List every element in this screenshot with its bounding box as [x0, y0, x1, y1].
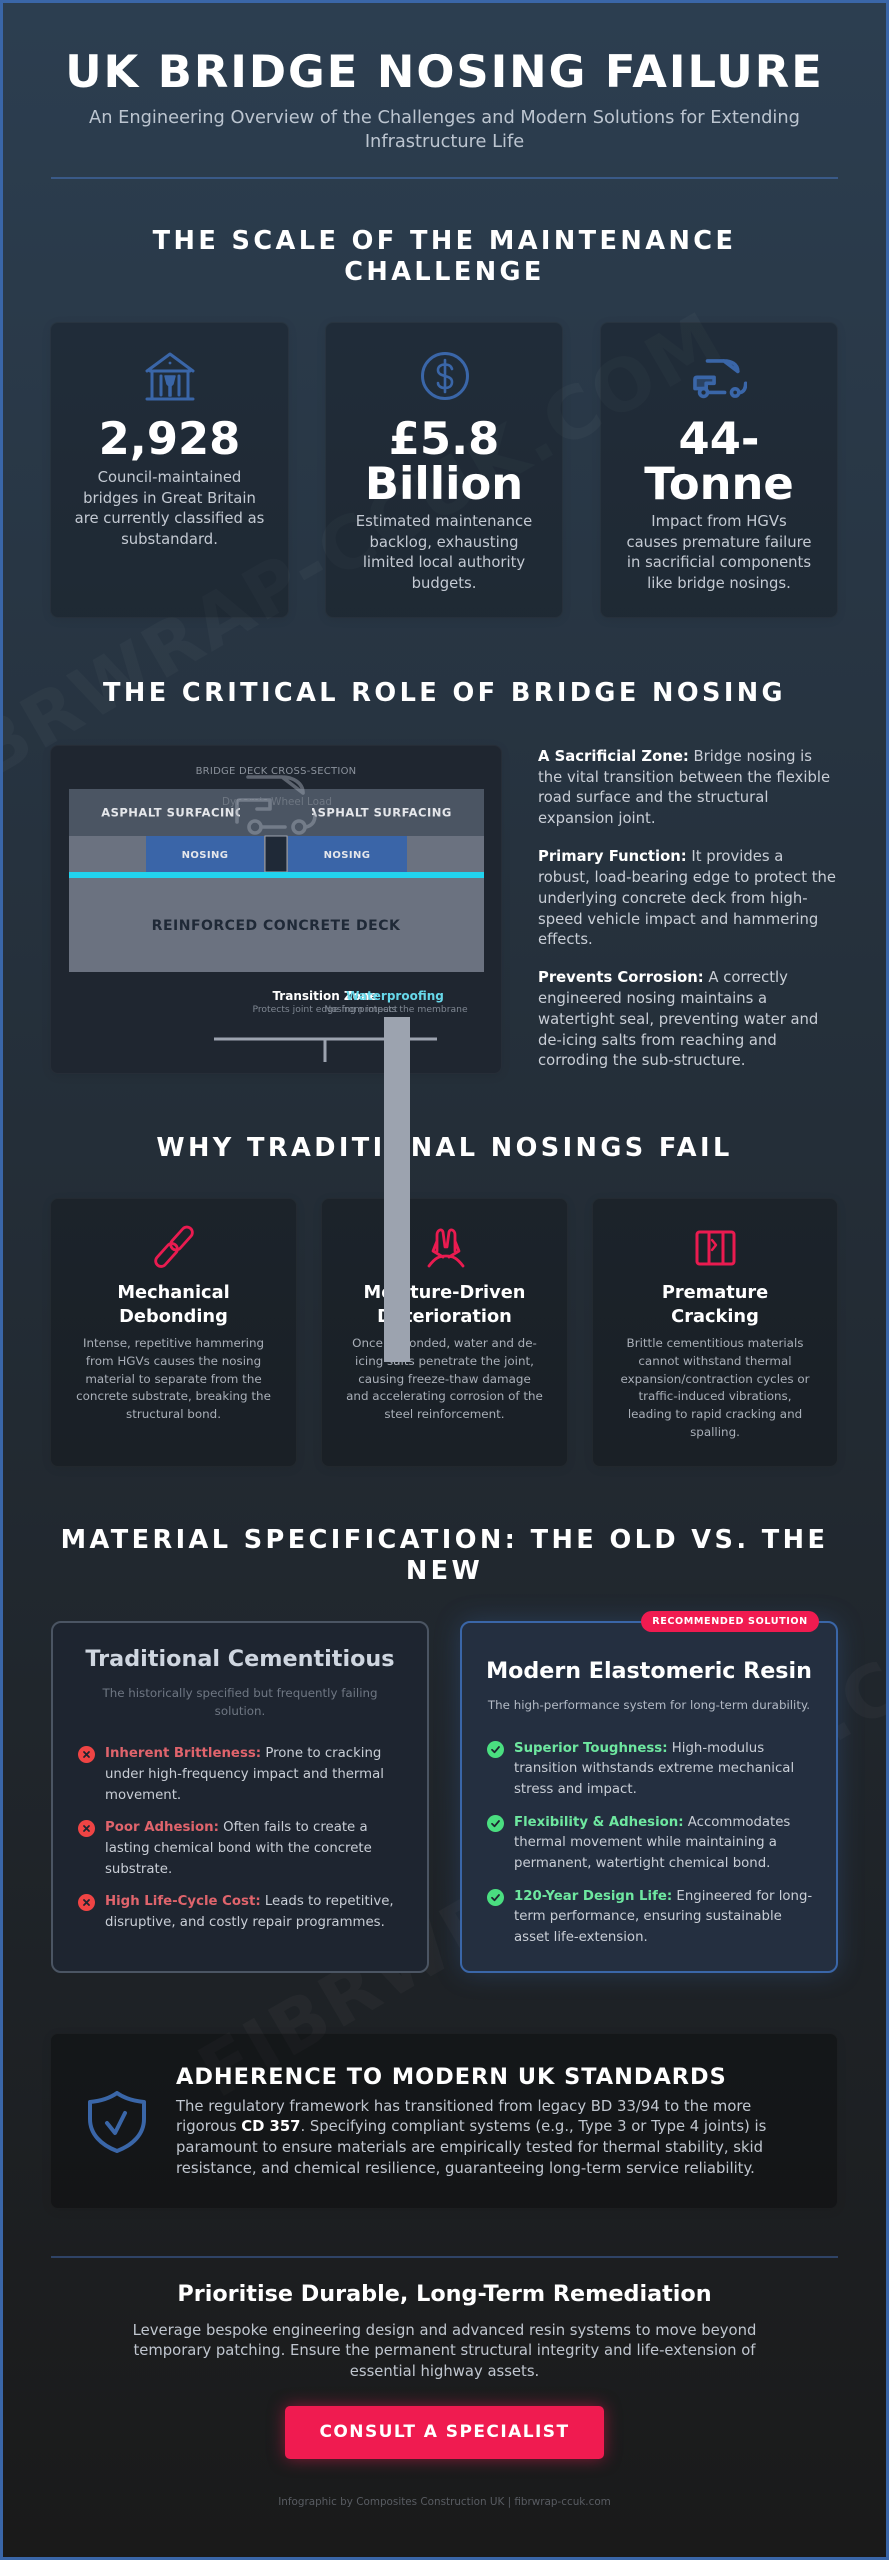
item: flexibility: Flexibility & Adhesion: Accommodates [514, 1814, 790, 1830]
label: waterproofing: Nosing protects the membrane [324, 1004, 468, 1015]
icon: chain link [154, 1226, 194, 1268]
layer: asphalt: ASPHALT SURFACING [308, 806, 452, 820]
stat caption: bridges in Great Britain [83, 490, 256, 507]
icon: cracked panel [696, 1230, 736, 1266]
icon: cross [78, 1746, 95, 1763]
paragraph: sacrificial zone [538, 748, 830, 827]
subtitle [89, 107, 800, 152]
cause title: Premature [662, 1282, 768, 1303]
recommended badge [641, 1611, 819, 1632]
paragraph: sacrificial zone: expansion joint. [538, 810, 656, 827]
panel: premature cracking [592, 1198, 838, 1467]
icon: currency [421, 352, 469, 400]
stat caption: like bridge nosings. [647, 575, 791, 592]
stat number: 2,928 [99, 412, 240, 465]
stat caption: are currently classified as [75, 510, 264, 527]
panel: modern elastomeric resin [460, 1621, 838, 1973]
standards text: The regulatory framework has transitioned from legacy BD 33/94 to the more [176, 2098, 751, 2114]
panel: stat bridges [50, 322, 289, 618]
right nosing [288, 836, 407, 872]
paragraph: prevents corrosion: engineered nosing maintains a [538, 990, 767, 1007]
left nosing: NOSING [182, 850, 228, 861]
item: adhesion: Poor Adhesion: Often fails to create a [105, 1820, 368, 1835]
label: transition zone: Protects joint edge from impact [252, 1004, 398, 1015]
icon: hands and water [428, 1228, 464, 1268]
item: adhesion: lasting chemical bond with the concrete [105, 1841, 372, 1856]
stat number: Tonne [644, 457, 794, 510]
panel: moisture-driven deterioration [321, 1198, 568, 1467]
stat caption [356, 513, 532, 592]
standards text: resistance, and chemical resilience, guaranteeing long-term service reliability. [176, 2160, 755, 2177]
item: toughness [487, 1740, 794, 1797]
wheel load label: Dynamic Wheel Load [222, 796, 332, 808]
item: adhesion: substrate. [105, 1862, 172, 1877]
panel: bridge cross-section diagram [50, 745, 502, 1074]
stat caption: causes premature failure [626, 534, 812, 551]
panel subtitle [102, 1686, 378, 1718]
stat caption [626, 513, 812, 592]
stat number: Billion [365, 457, 523, 510]
heading: critical role: THE CRITICAL ROLE OF BRIDGE NOSING [103, 678, 786, 708]
cause text: Brittle cementitious materials [627, 1336, 803, 1350]
item: brittleness: Inherent Brittleness: Prone to cracking [105, 1746, 381, 1761]
item: design life: term performance, ensuring sustainable [514, 1909, 782, 1924]
panel: stat backlog [325, 322, 563, 618]
paragraph: sacrificial zone: A Sacrificial Zone: Bridge nosing is [538, 748, 812, 765]
heading: material specification: NEW [406, 1556, 483, 1586]
cause title: Moisture-Driven [364, 1282, 525, 1303]
dimension bracket [214, 1039, 437, 1062]
call-to-action heading: Prioritise Durable, Long-Term Remediation [177, 2281, 712, 2307]
call-to-action text: essential highway assets. [350, 2363, 539, 2380]
stray grey arrow shaft [384, 1017, 410, 1362]
stat number: £5.8 [389, 412, 499, 465]
item: brittleness: under high-frequency impact and thermal [105, 1767, 384, 1782]
cause text [76, 1336, 271, 1421]
layer: asphalt [69, 789, 484, 836]
cause title [662, 1282, 768, 1327]
layer: asphalt: ASPHALT SURFACING [101, 806, 245, 820]
item: flexibility [487, 1814, 790, 1871]
icon: cross [78, 1820, 95, 1837]
item: design life: asset life-extension. [514, 1930, 648, 1945]
standards heading: ADHERENCE TO MODERN UK STANDARDS [176, 2064, 727, 2090]
heading: material specification [61, 1525, 828, 1586]
standards text: rigorous CD 357. Specifying compliant systems (e.g., Type 3 or Type 4 joints) is [176, 2118, 766, 2135]
label: waterproofing [324, 989, 468, 1015]
recommended badge: RECOMMENDED SOLUTION [652, 1616, 808, 1627]
cause text: steel reinforcement. [384, 1407, 505, 1421]
heading: material specification: MATERIAL SPECIFICATION: THE OLD VS. THE [61, 1525, 828, 1555]
cause text: Intense, repetitive hammering [83, 1336, 264, 1350]
list: drawbacks [78, 1746, 394, 1930]
stat caption: substandard. [121, 531, 218, 548]
button: consult: CONSULT A SPECIALIST [319, 2422, 570, 2442]
concrete deck [69, 878, 484, 972]
left nosing [146, 836, 264, 872]
panel title: Modern Elastomeric Resin [486, 1658, 812, 1684]
item: cost [78, 1894, 394, 1930]
cause text: causing freeze-thaw damage [358, 1372, 531, 1386]
item: brittleness [78, 1746, 384, 1803]
panel: traditional cementitious [51, 1621, 429, 1973]
layer: side concrete [69, 836, 484, 872]
cause text: structural bond. [126, 1407, 221, 1421]
icon: check [487, 1815, 504, 1832]
expansion joint [265, 836, 287, 872]
call-to-action text: Leverage bespoke engineering design and advanced resin systems to move beyond [133, 2322, 756, 2338]
call-to-action text: temporary patching. Ensure the permanent structural integrity and life-extension of [133, 2342, 756, 2359]
icon: check [487, 1889, 504, 1906]
concrete deck: REINFORCED CONCRETE DECK [152, 918, 401, 934]
item: brittleness: movement. [105, 1788, 181, 1803]
stat caption: in sacrificial components [627, 554, 811, 571]
cause text: spalling. [690, 1425, 740, 1439]
label: transition zone: Transition Zone [272, 989, 378, 1003]
paragraph: primary function: effects. [538, 931, 593, 948]
list: benefits [487, 1740, 812, 1945]
right nosing: NOSING [324, 850, 370, 861]
paragraph: prevents corrosion: de-icing salts from reaching and [538, 1032, 777, 1049]
panel subtitle: solution. [215, 1704, 265, 1718]
panel title: Traditional Cementitious [85, 1646, 395, 1672]
panel subtitle: The high-performance system for long-term durability. [488, 1698, 810, 1712]
stat caption: Estimated maintenance [356, 513, 532, 530]
paragraph: prevents corrosion: Prevents Corrosion: A correctly [538, 969, 788, 986]
label: transition zone [252, 989, 398, 1015]
cause text: material to separate from the [85, 1372, 262, 1386]
item: adhesion [78, 1820, 372, 1877]
button: consult [285, 2406, 604, 2459]
stat caption: Council-maintained [98, 469, 241, 486]
icon: cross [78, 1894, 95, 1911]
paragraph: prevents corrosion: corroding the sub-structure. [538, 1052, 745, 1069]
item: flexibility: thermal movement while maintaining a [514, 1835, 777, 1850]
cause text: concrete substrate, breaking the [76, 1389, 271, 1403]
call-to-action text [0, 2320, 889, 2383]
heading: scale of the challenge: THE SCALE OF THE MAINTENANCE [153, 226, 736, 256]
paragraph: primary function: Primary Function: It provides a [538, 848, 783, 865]
subtitle: Infrastructure Life [365, 131, 524, 152]
stat number: 44- [679, 412, 759, 465]
item: toughness: Superior Toughness: High-modulus [514, 1740, 764, 1756]
standards text: paramount to ensure materials are empirically tested for thermal stability, skid [176, 2139, 763, 2156]
stat caption [75, 469, 264, 548]
item: design life: 120-Year Design Life: Engineered for long- [514, 1888, 812, 1904]
cause text: from HGVs causes the nosing [86, 1354, 261, 1368]
cause text: cannot withstand thermal [638, 1354, 792, 1368]
standards text [176, 2096, 766, 2179]
heading: scale of the challenge: CHALLENGE [344, 257, 545, 287]
panel subtitle: The historically specified but frequently failing [102, 1686, 378, 1700]
truck icon overlay [237, 777, 315, 835]
cause title: Cracking [671, 1306, 759, 1327]
cause text [346, 1336, 543, 1421]
label: waterproofing: Waterproofing [346, 989, 444, 1003]
paragraph: sacrificial zone: road surface and the structural [538, 789, 768, 806]
icon: shield check [87, 2091, 147, 2153]
item: toughness: transition withstands extreme mechanical [514, 1761, 794, 1776]
cause text: traffic-induced vibrations, [638, 1389, 792, 1403]
icon: check [487, 1741, 504, 1758]
diagram title: BRIDGE DECK CROSS-SECTION [196, 766, 356, 777]
cause title: Mechanical [117, 1282, 230, 1303]
cause title [117, 1282, 230, 1327]
cause text: icing salts penetrate the joint, [355, 1354, 534, 1368]
icon: bank building [145, 352, 194, 400]
paragraph: prevents corrosion [538, 969, 818, 1069]
panel: mechanical debonding [50, 1198, 297, 1467]
cause text [620, 1336, 810, 1439]
stat caption: Impact from HGVs [651, 513, 787, 530]
stat number [644, 412, 794, 510]
cause text: Once debonded, water and de- [352, 1336, 537, 1350]
panel: stat HGV impact [600, 322, 838, 618]
heading: why traditional fail: WHY TRADITIONAL NOSINGS FAIL [156, 1132, 733, 1162]
cause text: leading to rapid cracking and [628, 1407, 802, 1421]
stat number [365, 412, 523, 510]
waterproofing membrane [69, 872, 484, 878]
cause title [364, 1282, 525, 1327]
title: UK BRIDGE NOSING FAILURE [65, 45, 824, 98]
stat caption: budgets. [412, 575, 476, 592]
icon: truck [693, 359, 747, 398]
subtitle: An Engineering Overview of the Challenges and Modern Solutions for Extending [89, 107, 800, 128]
panel: UK standards [50, 2033, 838, 2209]
item: design life [487, 1888, 812, 1945]
paragraph: sacrificial zone: the vital transition between the flexible [538, 769, 830, 786]
item: cost: disruptive, and costly repair programmes. [105, 1915, 385, 1930]
footer credit: Infographic by Composites Construction UK | fibrwrap-ccuk.com [278, 2496, 611, 2508]
paragraph: primary function: speed vehicle impact and hammering [538, 911, 818, 928]
cause title: Debonding [119, 1306, 228, 1327]
item: toughness: stress and impact. [514, 1782, 637, 1797]
paragraph: prevents corrosion: watertight seal, preventing water and [538, 1011, 818, 1028]
paragraph: primary function: underlying concrete deck from high- [538, 890, 808, 907]
heading: scale of the challenge [152, 226, 736, 287]
cause text: and accelerating corrosion of the [346, 1389, 543, 1403]
item: cost: High Life-Cycle Cost: Leads to repetitive, [105, 1894, 394, 1909]
cause text: expansion/contraction cycles or [620, 1372, 809, 1386]
stat caption: limited local authority [363, 554, 525, 571]
diagram svg [69, 766, 484, 1062]
paragraph: primary function: robust, load-bearing edge to protect the [538, 869, 836, 886]
cause title: Deterioration [377, 1306, 512, 1327]
paragraph: primary function [538, 848, 836, 948]
stat caption: backlog, exhausting [370, 534, 518, 551]
item: flexibility: permanent, watertight chemical bond. [514, 1856, 770, 1871]
text block: role of nosing [538, 748, 836, 1069]
